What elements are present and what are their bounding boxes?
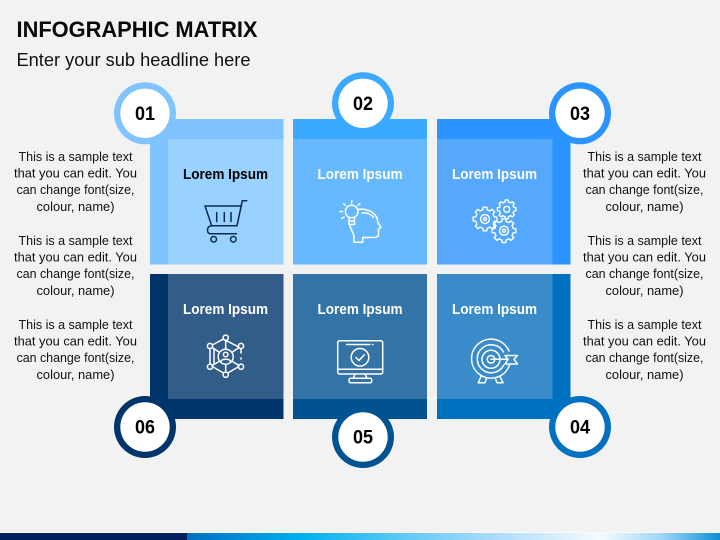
panel 04 <box>437 274 570 419</box>
heading 02: Lorem Ipsum <box>318 167 402 183</box>
badge 04 <box>549 396 611 458</box>
left text blocks: colour, name) <box>36 367 114 382</box>
right text blocks: that you can edit. You <box>583 166 706 180</box>
heading 03: Lorem Ipsum <box>452 167 537 183</box>
right text blocks: This is a sample text <box>588 233 702 248</box>
icon: gears <box>473 200 516 243</box>
right text blocks: can change font(size, <box>586 350 704 365</box>
badge 01: 01 <box>135 104 155 125</box>
badge 02: 02 <box>353 94 373 115</box>
badge 06 <box>114 396 176 458</box>
icon: target with arrow <box>472 339 518 383</box>
badge 02 <box>332 72 394 134</box>
left text blocks: This is a sample text <box>18 149 133 164</box>
left text blocks <box>14 149 137 382</box>
panel 05 <box>293 274 427 419</box>
badge 01 <box>114 82 176 144</box>
right text blocks <box>583 149 706 382</box>
badge 03 <box>549 82 611 144</box>
right text blocks: can change font(size, <box>586 266 704 281</box>
badge 05: 05 <box>353 428 373 448</box>
badge 06: 06 <box>135 418 155 438</box>
right text blocks: colour, name) <box>606 367 684 382</box>
title: INFOGRAPHIC MATRIX <box>16 17 258 42</box>
heading 04: Lorem Ipsum <box>452 302 537 318</box>
right text blocks: that you can edit. You <box>583 334 706 348</box>
left text blocks: This is a sample text <box>18 233 133 248</box>
panel 06 <box>150 274 284 419</box>
left text blocks: that you can edit. You <box>14 334 137 348</box>
right text blocks: This is a sample text <box>588 317 702 332</box>
left text blocks: that you can edit. You <box>14 166 137 180</box>
bottom colour bar <box>0 532 720 540</box>
icon: people network <box>207 335 244 377</box>
icon: head with light bulb <box>340 200 381 242</box>
badge 05 <box>332 406 394 468</box>
badge 03: 03 <box>570 104 590 125</box>
left text blocks: can change font(size, <box>16 266 134 281</box>
left text blocks: can change font(size, <box>16 350 134 365</box>
icon: shopping cart <box>205 201 247 242</box>
badge 04: 04 <box>570 418 590 438</box>
heading 06: Lorem Ipsum <box>183 302 268 318</box>
left text blocks: that you can edit. You <box>14 250 137 264</box>
right text blocks: colour, name) <box>606 199 684 214</box>
subtitle: Enter your sub headline here <box>16 50 250 70</box>
left text blocks: colour, name) <box>36 199 114 214</box>
left text blocks: colour, name) <box>36 283 114 298</box>
right text blocks: This is a sample text <box>588 149 702 164</box>
right text blocks: colour, name) <box>606 283 684 298</box>
panel 02 <box>293 119 427 264</box>
right text blocks: that you can edit. You <box>583 250 706 264</box>
left text blocks: This is a sample text <box>18 317 133 332</box>
heading 01: Lorem Ipsum <box>183 167 268 183</box>
panel 03 <box>437 119 570 264</box>
icon: monitor with check <box>338 341 383 383</box>
panel 01 <box>150 119 284 264</box>
left text blocks: can change font(size, <box>16 182 134 197</box>
heading 05: Lorem Ipsum <box>318 302 402 318</box>
right text blocks: can change font(size, <box>586 182 704 197</box>
